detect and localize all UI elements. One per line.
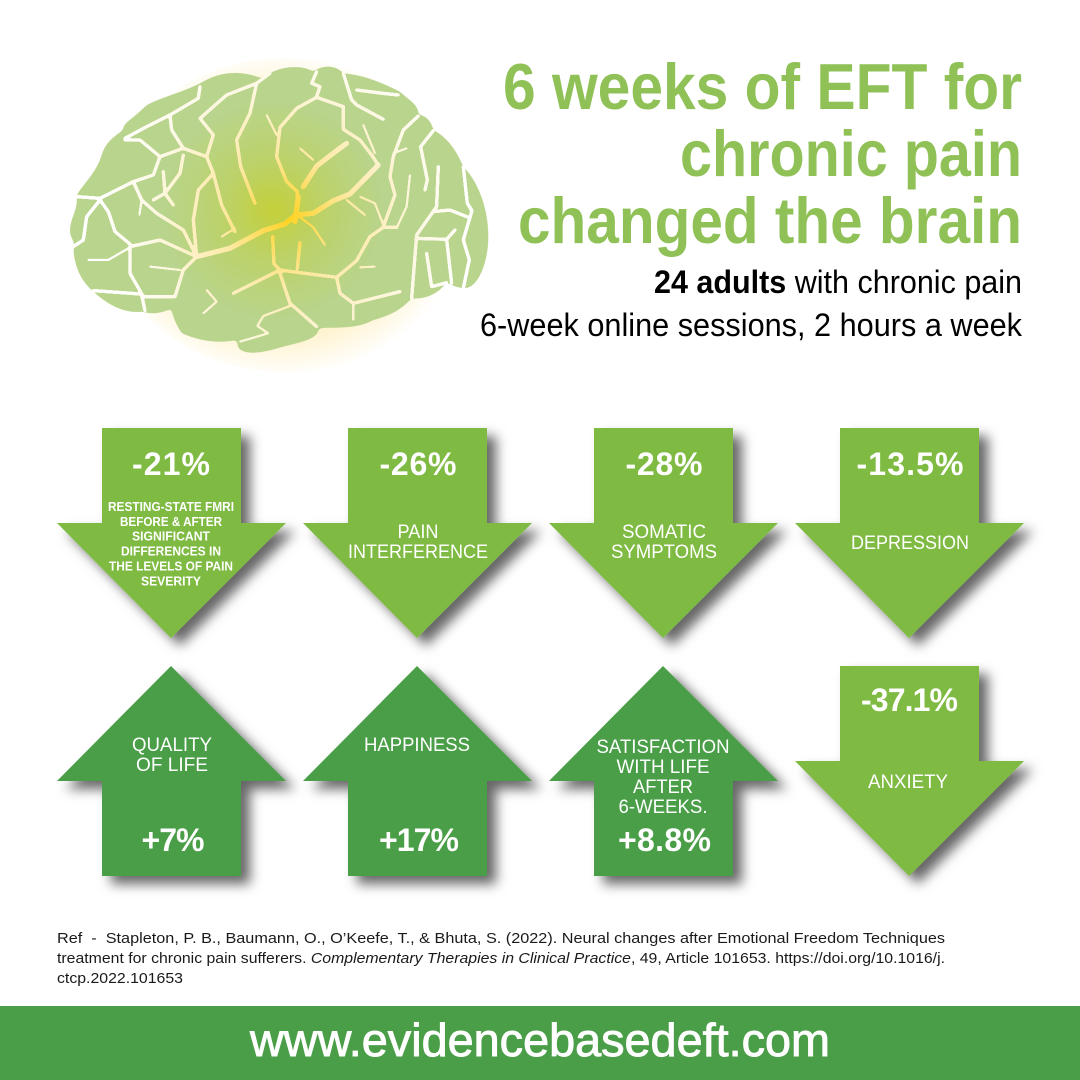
arrow: quality of life +7%: OF LIFE — [136, 754, 208, 776]
arrow: resting-state fMRI -21%: BEFORE & AFTER — [120, 515, 222, 529]
arrow: pain interference -26%: INTERFERENCE — [348, 541, 488, 563]
arrow: satisfaction with life +8.8%: 6-WEEKS. — [618, 796, 708, 818]
arrow: resting-state fMRI -21%: DIFFERENCES IN — [121, 544, 221, 558]
footer website url: www.evidencebasedeft.com — [249, 1014, 830, 1066]
reference text: treatment for chronic pain sufferers. Complementary Therapies in Clinical Practice , 49, Article 101653. https://doi.org/10.1016/j. — [57, 950, 945, 967]
arrow: pain interference -26%: PAIN — [398, 521, 438, 543]
arrow: quality of life +7% — [57, 666, 286, 876]
arrow: quality of life +7%: +7% — [142, 822, 204, 858]
reference text — [57, 930, 945, 987]
arrow: happiness +17%: +17% — [379, 822, 459, 858]
arrow: anxiety -37.1% — [795, 666, 1024, 876]
footer band — [0, 1006, 1080, 1080]
arrow: depression -13.5%: DEPRESSION — [851, 532, 969, 554]
arrow: satisfaction with life +8.8%: AFTER — [633, 776, 693, 798]
arrow: satisfaction with life +8.8%: +8.8% — [618, 822, 711, 858]
arrow: satisfaction with life +8.8% — [549, 666, 778, 876]
reference text: ctcp.2022.101653 — [57, 970, 183, 987]
arrow: satisfaction with life +8.8%: WITH LIFE — [616, 756, 710, 778]
title — [503, 50, 1022, 257]
arrow: happiness +17%: HAPPINESS — [364, 734, 470, 756]
subtitle: 6-week online sessions, 2 hours a week — [480, 307, 1023, 343]
arrow: resting-state fMRI -21%: SIGNIFICANT — [132, 530, 210, 544]
title: changed the brain — [518, 184, 1022, 257]
arrow: somatic symptoms -28% — [549, 428, 778, 638]
arrow: depression -13.5%: -13.5% — [856, 446, 964, 482]
arrow: resting-state fMRI -21%: SEVERITY — [141, 574, 202, 588]
title: chronic pain — [680, 117, 1022, 190]
arrow: resting-state fMRI -21%: THE LEVELS OF PAIN — [109, 560, 233, 574]
reference text: Ref - Stapleton, P. B., Baumann, O., O’Keefe, T., & Bhuta, S. (2022). Neural changes after Emotional Freedom Techniques — [57, 930, 945, 947]
arrow: depression -13.5% — [795, 428, 1024, 638]
arrow: anxiety -37.1%: -37.1% — [861, 682, 958, 718]
arrow: satisfaction with life +8.8%: SATISFACTION — [596, 736, 730, 758]
arrow: somatic symptoms -28%: SYMPTOMS — [611, 541, 717, 563]
arrow: somatic symptoms -28%: -28% — [626, 446, 702, 482]
title: 6 weeks of EFT for — [503, 50, 1022, 123]
arrow: pain interference -26%: -26% — [380, 446, 456, 482]
arrow: quality of life +7%: QUALITY — [132, 734, 212, 756]
arrow: pain interference -26% — [303, 428, 532, 638]
arrow: happiness +17% — [303, 666, 532, 876]
arrow: resting-state fMRI -21%: RESTING-STATE FMRI — [108, 500, 234, 514]
arrow: resting-state fMRI -21%: -21% — [132, 446, 210, 482]
arrow: somatic symptoms -28%: SOMATIC — [622, 521, 706, 543]
arrow: resting-state fMRI -21% — [57, 428, 286, 638]
subtitle — [480, 264, 1023, 343]
arrow: anxiety -37.1%: ANXIETY — [868, 771, 948, 793]
subtitle: 24 adults with chronic pain — [654, 264, 1022, 300]
icon: brain illustration — [70, 58, 488, 372]
